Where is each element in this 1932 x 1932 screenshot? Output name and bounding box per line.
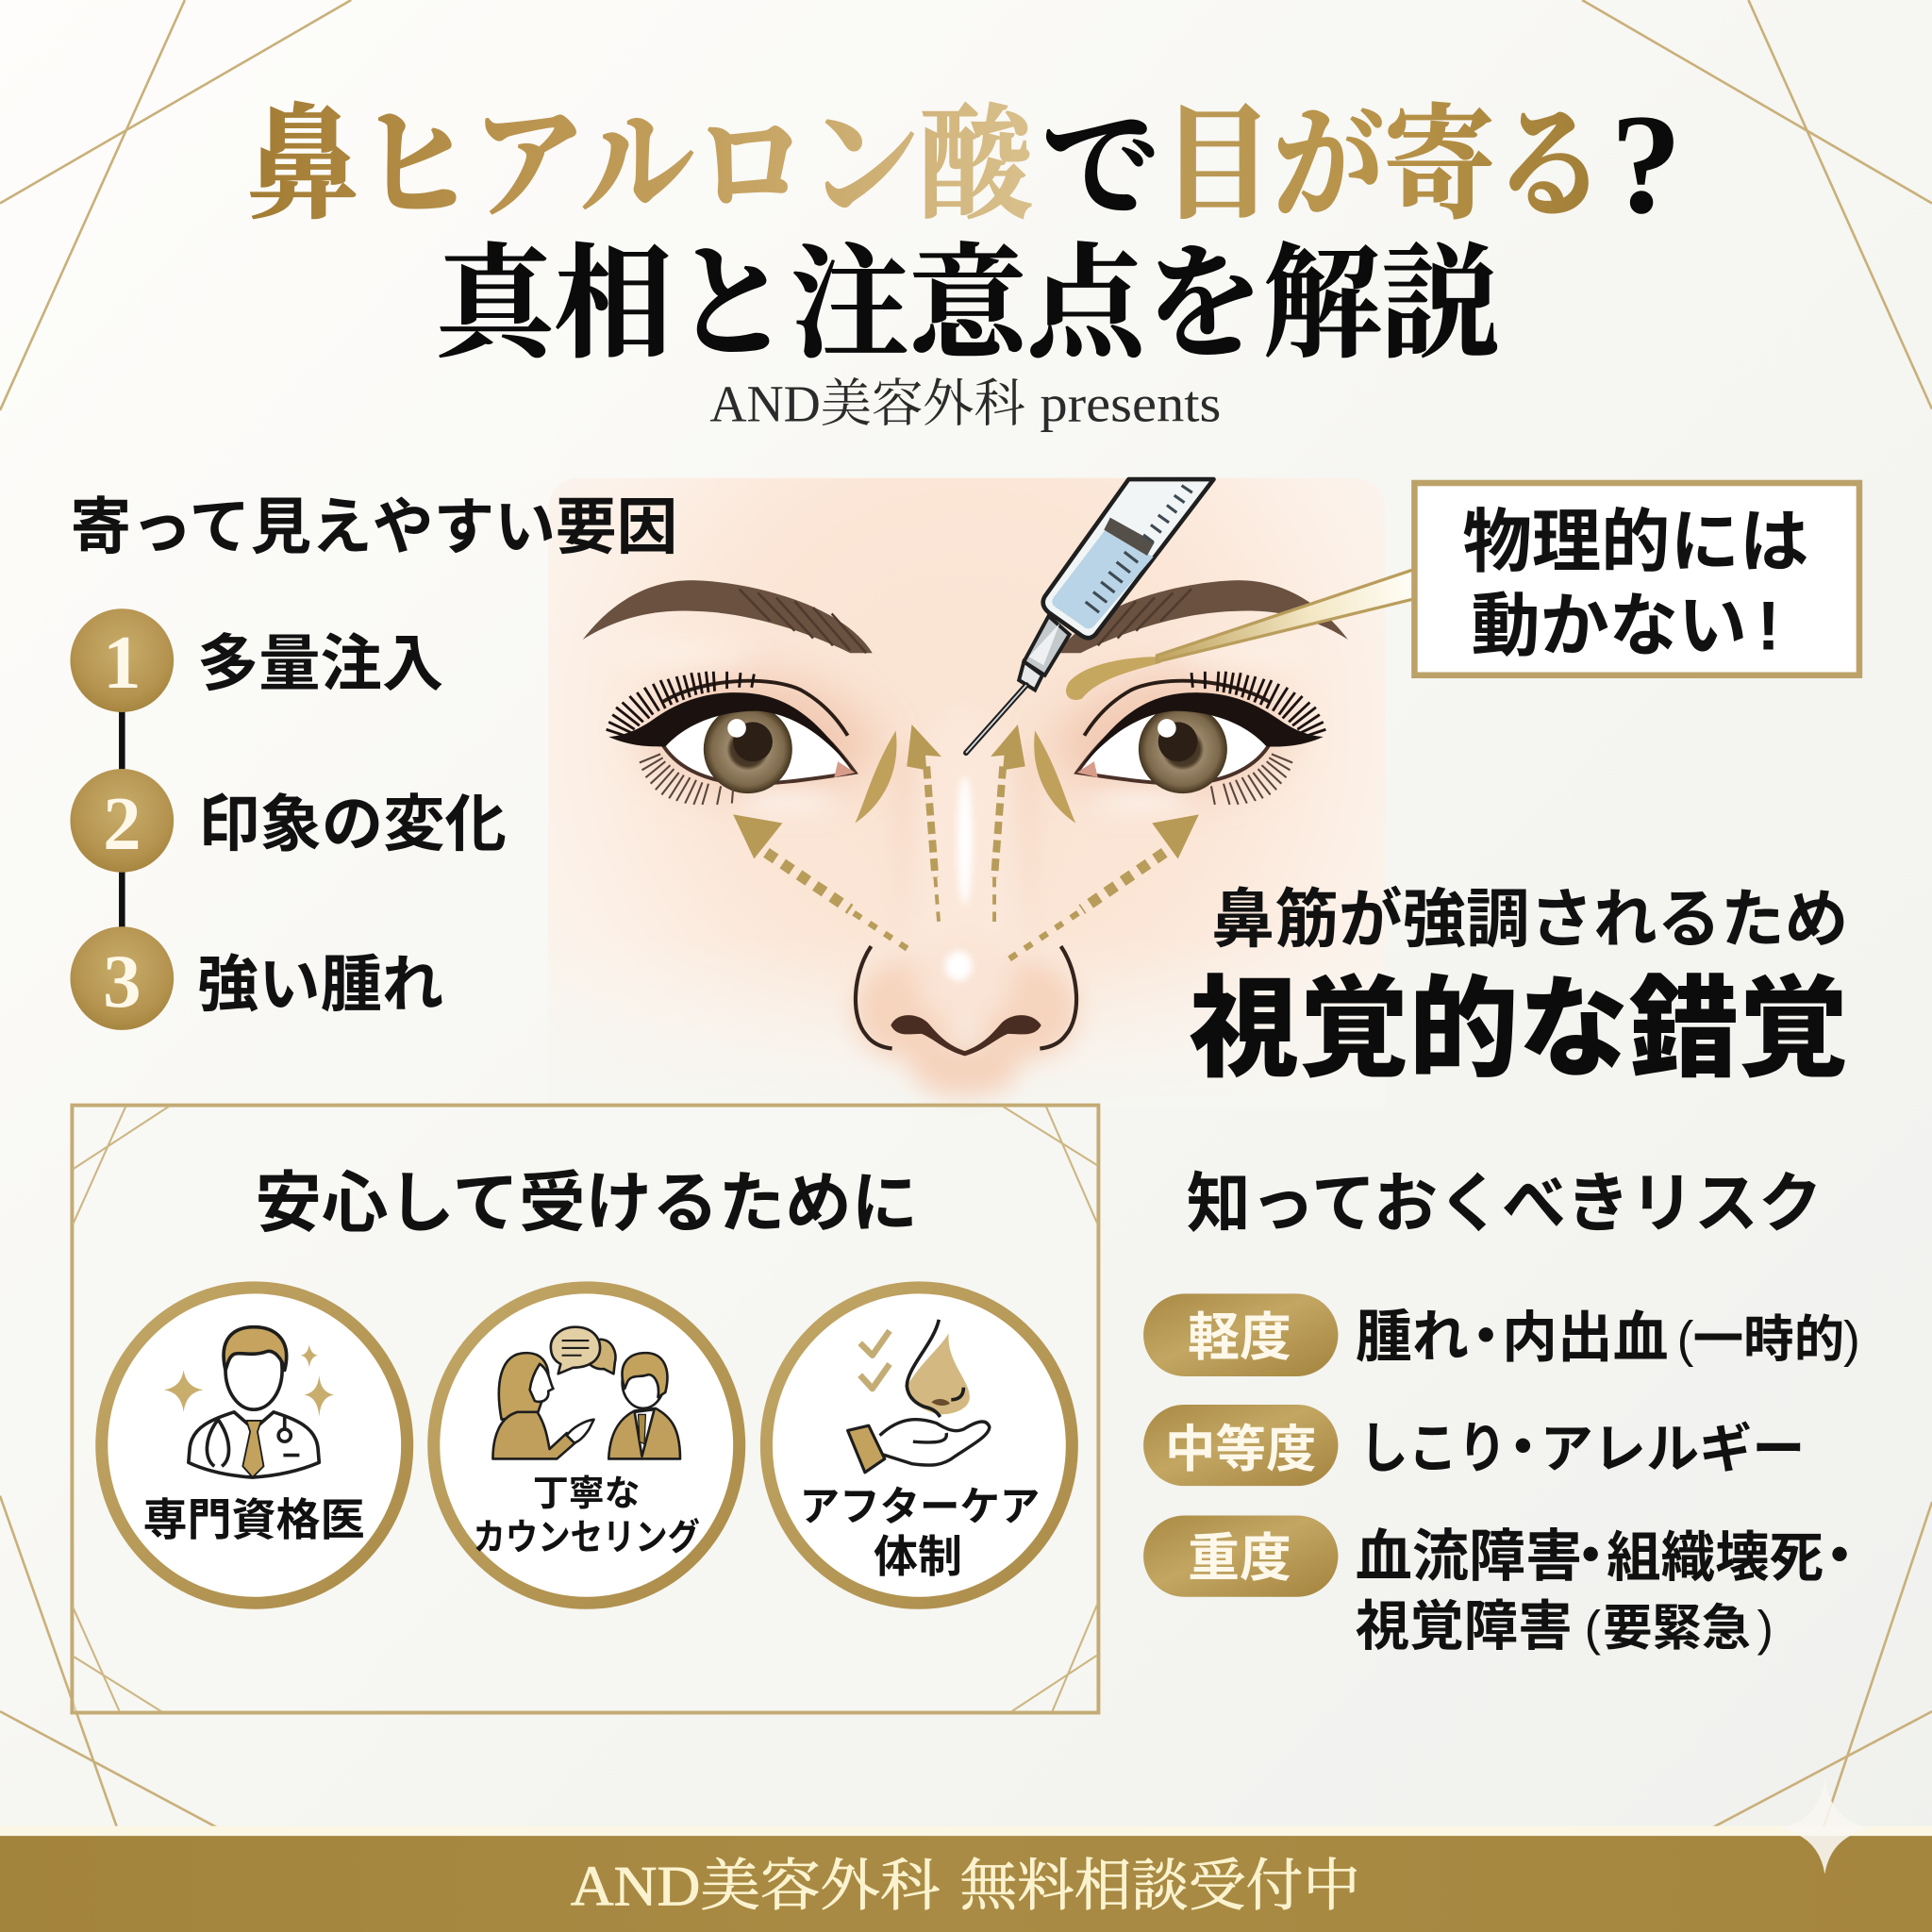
number 2	[70, 769, 174, 873]
icon: doctor	[189, 1327, 319, 1477]
eyebrow: right	[1058, 580, 1348, 653]
pill: mild: 軽度	[1188, 1308, 1291, 1367]
arrow: right diagonal	[1008, 814, 1199, 959]
icon: conversation	[492, 1327, 680, 1458]
lower nose skin	[854, 702, 1078, 1096]
callout	[1157, 483, 1859, 675]
risk: moderate: アレルギー	[1541, 1420, 1805, 1479]
panel: factors	[70, 492, 677, 1030]
footer text: AND美容外科	[571, 1854, 941, 1917]
risk: moderate: ・	[1494, 1417, 1551, 1480]
risk: mild: 一時的	[1693, 1312, 1844, 1368]
footer band	[0, 1826, 1932, 1932]
risk: mild: ・	[1457, 1306, 1514, 1369]
title: 目が寄る	[1162, 98, 1606, 234]
icon: sparkles	[164, 1344, 334, 1417]
number 1	[70, 608, 174, 712]
badge: counselling	[434, 1288, 740, 1603]
panel heading: 安心して受けるために	[255, 1166, 918, 1241]
number 3	[70, 926, 174, 1030]
number 1: 1	[103, 620, 142, 705]
nose highlights	[945, 776, 973, 981]
arrow: left diagonal	[733, 814, 909, 950]
callout box	[1414, 483, 1859, 675]
pill: severe: 重度	[1188, 1529, 1291, 1588]
risk: severe: ・	[1811, 1525, 1868, 1589]
risk: severe: 要緊急	[1603, 1602, 1751, 1657]
pill: moderate	[1143, 1405, 1338, 1486]
nose outline	[856, 946, 1076, 1049]
risk: mild: 腫れ	[1356, 1306, 1469, 1369]
title: 鼻ヒアルロン酸	[246, 98, 1037, 234]
badge: aftercare: 体制	[874, 1532, 962, 1582]
callout text: 物理的には	[1462, 505, 1808, 581]
risk: severe: (	[1585, 1602, 1602, 1657]
title: ?	[1610, 85, 1682, 243]
number 3: 3	[103, 939, 142, 1024]
face illustration	[548, 478, 1385, 1109]
injected gold area	[1066, 657, 1160, 700]
subtitle	[709, 375, 1221, 433]
eye: left	[607, 672, 855, 805]
risk: mild: (	[1677, 1312, 1694, 1368]
factor 2: 印象の変化	[198, 790, 507, 858]
risk: severe: 組織壊死	[1607, 1528, 1824, 1589]
factor 3: 強い腫れ	[197, 950, 443, 1019]
arrow: left vertical	[907, 724, 941, 924]
panel: reassurance	[72, 1106, 1098, 1713]
risk: mild: 内出血	[1502, 1307, 1668, 1369]
sparkle	[1779, 1779, 1872, 1874]
footer text	[571, 1854, 1360, 1917]
connector line	[120, 702, 125, 937]
risk: severe	[1356, 1525, 1868, 1657]
risks section	[1143, 1167, 1868, 1657]
title: 真相と注意点を解説	[436, 238, 1500, 374]
syringe	[966, 479, 1214, 753]
pill: moderate: 中等度	[1165, 1422, 1317, 1477]
illusion text: 鼻筋が強調されるため	[1211, 885, 1848, 956]
callout: !	[1757, 588, 1780, 664]
subtitle: presents	[1040, 375, 1221, 433]
risk: moderate: しこり	[1359, 1419, 1507, 1480]
number 2: 2	[103, 781, 142, 866]
badge: aftercare	[766, 1288, 1072, 1603]
callout pointer	[1157, 569, 1414, 661]
risk: severe: 視覚障害	[1356, 1597, 1573, 1657]
subtitle: AND美容外科	[709, 375, 1025, 433]
pill: severe	[1143, 1516, 1338, 1597]
skin	[548, 478, 1385, 1107]
badge: counselling: カウンセリング	[474, 1518, 700, 1558]
risks heading: 知っておくべきリスク	[1187, 1167, 1823, 1241]
factor 1: 多量注入	[197, 629, 443, 698]
label: 丁寧な	[533, 1474, 641, 1514]
badge: specialist	[102, 1288, 408, 1603]
illusion text	[1189, 885, 1848, 1091]
title	[246, 85, 1682, 374]
nostrils	[891, 1015, 1041, 1056]
eye: right	[1077, 672, 1325, 805]
footer text: 無料相談受付中	[959, 1854, 1360, 1917]
label: アフターケア	[800, 1485, 1040, 1530]
eye sockets	[641, 675, 1291, 790]
illusion text: 視覚的な錯覚	[1189, 968, 1848, 1091]
crescent marks	[855, 731, 1075, 823]
risk: mild: )	[1843, 1312, 1860, 1368]
panel frame	[72, 1106, 1098, 1713]
risk: severe: )	[1757, 1602, 1774, 1657]
arrow: right vertical	[991, 724, 1025, 924]
risk: severe: 血流障害	[1356, 1525, 1582, 1589]
eyebrow: left	[583, 580, 873, 653]
factors heading: 寄って見えやすい要因	[70, 492, 677, 561]
pill: mild	[1143, 1293, 1338, 1376]
risk: severe: ・	[1562, 1525, 1619, 1589]
label: 専門資格医	[143, 1494, 365, 1544]
callout: 動かない	[1472, 588, 1747, 664]
icon: nose and hand	[848, 1320, 990, 1473]
title: で	[1041, 102, 1159, 233]
